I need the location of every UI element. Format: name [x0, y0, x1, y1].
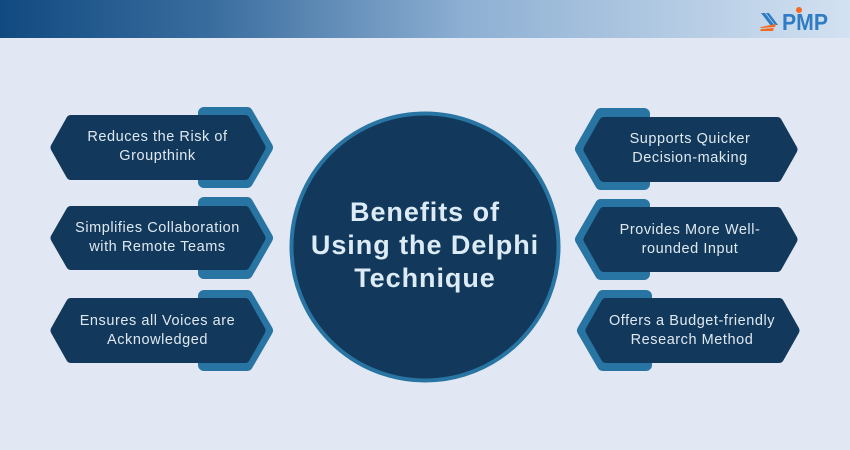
label: Ensures all Voices are	[80, 313, 235, 329]
title: Benefits of	[350, 197, 500, 227]
label: Decision-making	[632, 150, 748, 166]
logo: PMP	[760, 7, 828, 35]
hexagon	[56, 303, 260, 358]
accent shape	[204, 113, 267, 182]
hexagon	[590, 303, 794, 358]
label: Supports Quicker	[630, 131, 750, 147]
hexagon	[588, 122, 792, 177]
label: Reduces the Risk of	[87, 129, 228, 145]
label: with Remote Teams	[88, 239, 226, 255]
left item 3	[56, 296, 267, 365]
label: Offers a Budget-friendly	[609, 313, 775, 329]
hexagon	[56, 211, 260, 265]
hexagon	[588, 212, 792, 267]
label: Acknowledged	[107, 332, 208, 348]
logo wordmark: PMP	[782, 9, 828, 35]
label: Provides More Well-	[620, 222, 760, 238]
label: rounded Input	[642, 241, 738, 257]
left item 1	[56, 113, 267, 182]
accent shape	[204, 296, 267, 365]
hexagon	[56, 120, 260, 175]
accent shape	[581, 205, 644, 274]
label: Research Method	[631, 332, 753, 348]
accent shape	[581, 114, 644, 184]
central circle	[292, 114, 558, 380]
label: Simplifies Collaboration	[75, 220, 240, 236]
title: Technique	[354, 263, 496, 293]
header band	[0, 0, 850, 38]
logo icon	[760, 13, 778, 31]
right item 1	[581, 114, 792, 184]
label: Groupthink	[119, 148, 196, 164]
right item 3	[583, 296, 794, 365]
circle	[292, 114, 558, 380]
accent shape	[204, 203, 267, 273]
title: Using the Delphi	[311, 230, 539, 260]
accent shape	[583, 296, 646, 365]
right item 2	[581, 205, 792, 274]
left item 2	[56, 203, 267, 273]
